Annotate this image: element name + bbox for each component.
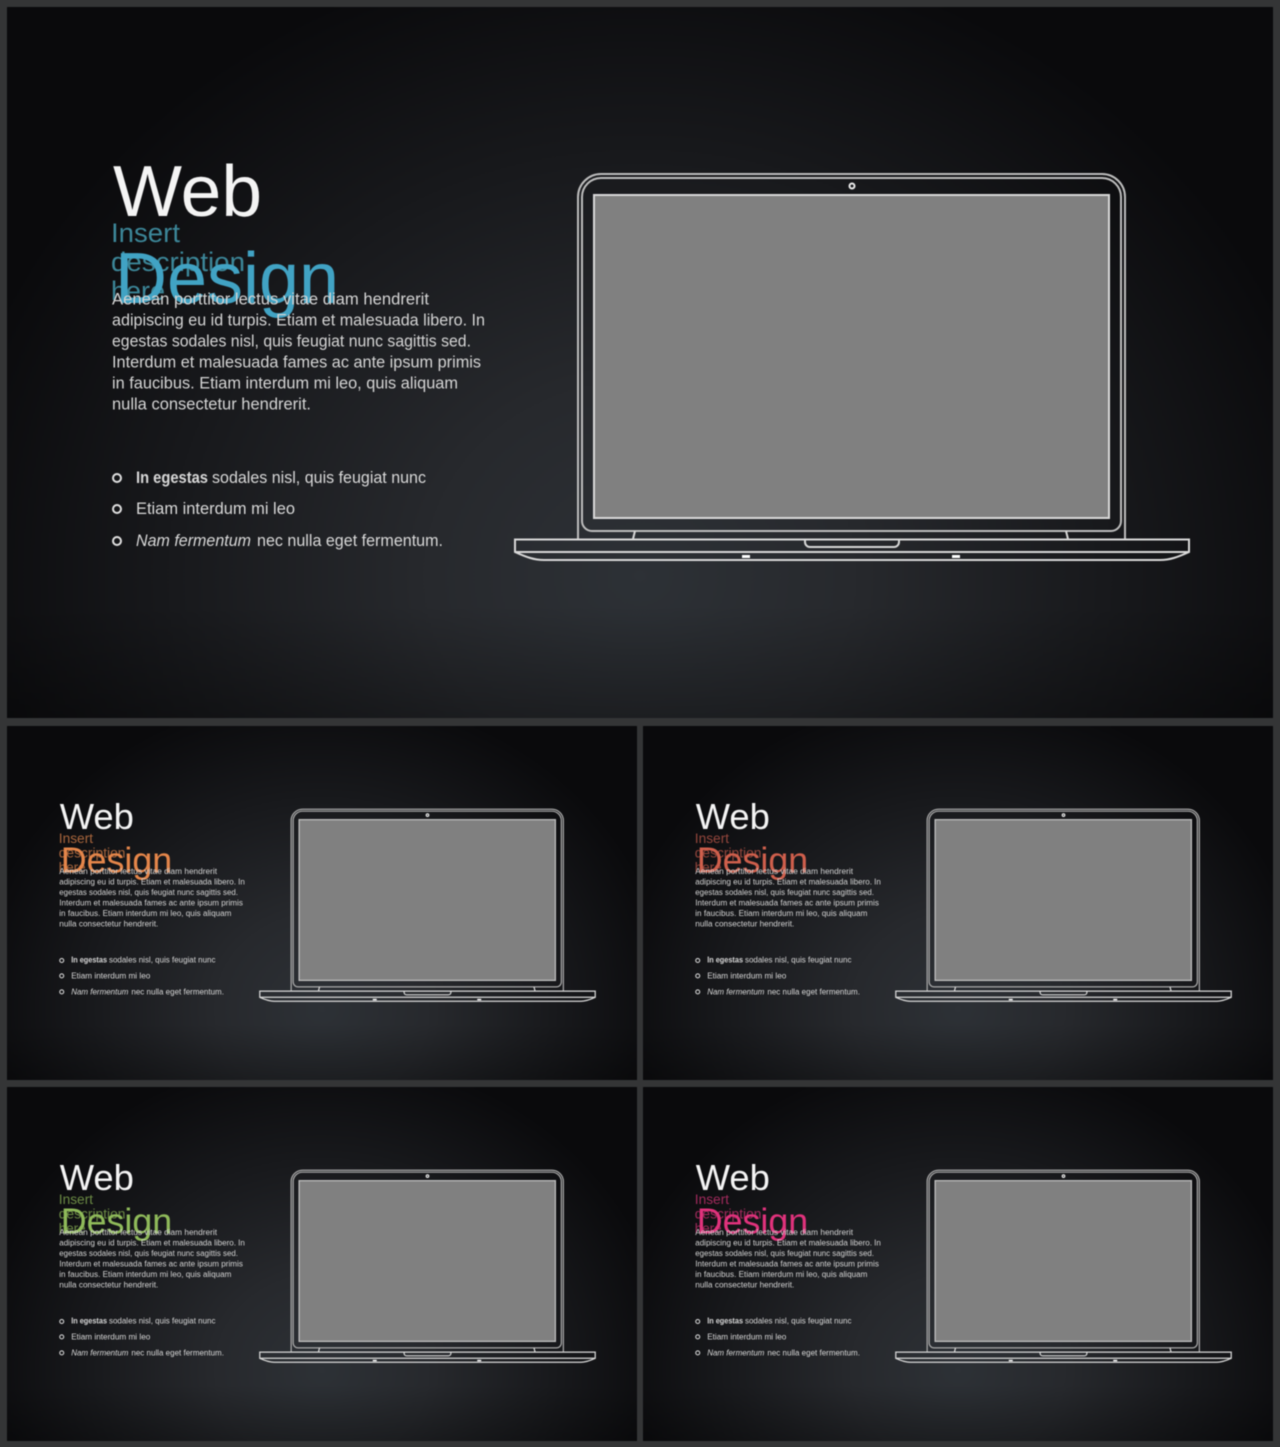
icon: laptop outline xyxy=(260,1170,595,1362)
bullet list: Etiam interdum mi leo xyxy=(707,1332,787,1341)
subtitle: Insert description here: Insert xyxy=(695,1192,729,1207)
bullet list xyxy=(113,469,443,550)
heading: Design: Design xyxy=(61,840,172,880)
bullet list: nec nulla eget fermentum. xyxy=(257,532,443,550)
subtitle: Insert description here: description xyxy=(59,1206,125,1221)
bullet list: nec nulla eget fermentum. xyxy=(767,987,860,996)
body paragraph xyxy=(695,867,881,928)
bullet list: In egestas xyxy=(71,1316,107,1325)
subtitle: Insert description here: Insert xyxy=(695,831,729,846)
bullet list: In egestas xyxy=(71,955,107,964)
bullet list: Nam fermentum xyxy=(136,532,251,550)
body paragraph: Interdum et malesuada fames ac ante ipsum primis xyxy=(112,354,481,372)
body paragraph: in faucibus. Etiam interdum mi leo, quis aliquam xyxy=(112,375,458,393)
body paragraph: Aenean porttitor lectus vitae diam hendrerit xyxy=(59,867,218,876)
bullet list: In egestas xyxy=(707,1316,743,1325)
subtitle: Insert description here xyxy=(695,831,761,875)
body paragraph: adipiscing eu id turpis. Etiam et malesuada libero. In xyxy=(695,878,881,887)
bullet list: Nam fermentum xyxy=(707,1348,765,1357)
subtitle: Insert description here: Insert xyxy=(59,1192,93,1207)
bullet list: Etiam interdum mi leo xyxy=(136,500,295,518)
panel: small slide, green xyxy=(7,1087,637,1441)
bullet list: sodales nisl, quis feugiat nunc xyxy=(109,955,216,964)
icon: laptop outline xyxy=(896,1170,1231,1362)
subtitle: Insert description here: description xyxy=(111,247,245,277)
icon: laptop outline xyxy=(515,174,1189,560)
body paragraph xyxy=(695,1228,881,1289)
bullet list: sodales nisl, quis feugiat nunc xyxy=(109,1316,216,1325)
panel: small slide, red xyxy=(643,726,1273,1080)
body paragraph: Interdum et malesuada fames ac ante ipsum primis xyxy=(59,1260,243,1269)
body paragraph: egestas sodales nisl, quis feugiat nunc sagittis sed. xyxy=(112,333,471,351)
subtitle: Insert description here xyxy=(695,1192,761,1236)
heading: Web: Web xyxy=(696,1158,770,1198)
heading: Web: Web xyxy=(60,1158,134,1198)
body paragraph: Interdum et malesuada fames ac ante ipsum primis xyxy=(695,1260,879,1269)
bullet list xyxy=(696,1316,860,1357)
subtitle: Insert description here: here xyxy=(695,1221,722,1236)
bullet list: In egestas xyxy=(136,469,208,487)
bullet list: sodales nisl, quis feugiat nunc xyxy=(745,1316,852,1325)
body paragraph: egestas sodales nisl, quis feugiat nunc sagittis sed. xyxy=(59,888,238,897)
bullet list: In egestas xyxy=(707,955,743,964)
body paragraph: adipiscing eu id turpis. Etiam et malesuada libero. In xyxy=(59,1239,245,1248)
heading: Web: Web xyxy=(60,797,134,837)
bullet list xyxy=(60,955,224,996)
bullet list xyxy=(60,1316,224,1357)
body paragraph xyxy=(112,291,485,414)
heading: Design: Design xyxy=(697,1201,808,1241)
subtitle: Insert description here: here xyxy=(111,276,165,306)
bullet list: nec nulla eget fermentum. xyxy=(131,987,224,996)
body paragraph: nulla consectetur hendrerit. xyxy=(59,1280,158,1289)
subtitle: Insert description here xyxy=(59,1192,125,1236)
body paragraph xyxy=(59,1228,245,1289)
bullet list: Etiam interdum mi leo xyxy=(707,971,787,980)
heading: Design: Design xyxy=(61,1201,172,1241)
icon: laptop outline xyxy=(896,809,1231,1001)
body paragraph: Interdum et malesuada fames ac ante ipsum primis xyxy=(59,899,243,908)
icon: laptop outline xyxy=(260,809,595,1001)
panel: main slide, blue xyxy=(7,7,1273,718)
body paragraph xyxy=(59,867,245,928)
bullet list: Etiam interdum mi leo xyxy=(71,1332,151,1341)
subtitle: Insert description here: Insert xyxy=(111,218,181,248)
bullet list: Etiam interdum mi leo xyxy=(71,971,151,980)
body paragraph: nulla consectetur hendrerit. xyxy=(59,919,158,928)
subtitle: Insert description here xyxy=(111,218,245,306)
body paragraph: egestas sodales nisl, quis feugiat nunc sagittis sed. xyxy=(695,1249,874,1258)
subtitle: Insert description here: here xyxy=(59,860,86,875)
heading: Design: Design xyxy=(115,239,339,319)
panel: small slide, pink xyxy=(643,1087,1273,1441)
bullet list: Nam fermentum xyxy=(71,987,129,996)
body paragraph: Aenean porttitor lectus vitae diam hendrerit xyxy=(695,867,854,876)
body paragraph: nulla consectetur hendrerit. xyxy=(695,1280,794,1289)
subtitle: Insert description here: Insert xyxy=(59,831,93,846)
body paragraph: Interdum et malesuada fames ac ante ipsum primis xyxy=(695,899,879,908)
body paragraph: adipiscing eu id turpis. Etiam et malesuada libero. In xyxy=(695,1239,881,1248)
bullet list: sodales nisl, quis feugiat nunc xyxy=(745,955,852,964)
subtitle: Insert description here xyxy=(59,831,125,875)
heading: Web: Web xyxy=(696,797,770,837)
body paragraph: Aenean porttitor lectus vitae diam hendrerit xyxy=(59,1228,218,1237)
body paragraph: nulla consectetur hendrerit. xyxy=(112,396,311,414)
body paragraph: Aenean porttitor lectus vitae diam hendrerit xyxy=(112,291,429,309)
body paragraph: in faucibus. Etiam interdum mi leo, quis aliquam xyxy=(59,1270,232,1279)
subtitle: Insert description here: here xyxy=(59,1221,86,1236)
body paragraph: in faucibus. Etiam interdum mi leo, quis aliquam xyxy=(59,909,232,918)
panel: small slide, orange xyxy=(7,726,637,1080)
body paragraph: in faucibus. Etiam interdum mi leo, quis aliquam xyxy=(695,909,868,918)
bullet list: sodales nisl, quis feugiat nunc xyxy=(212,469,426,487)
body paragraph: egestas sodales nisl, quis feugiat nunc sagittis sed. xyxy=(59,1249,238,1258)
body paragraph: nulla consectetur hendrerit. xyxy=(695,919,794,928)
subtitle: Insert description here: description xyxy=(59,845,125,860)
subtitle: Insert description here: description xyxy=(695,1206,761,1221)
heading: Web: Web xyxy=(113,152,262,232)
body paragraph: Aenean porttitor lectus vitae diam hendrerit xyxy=(695,1228,854,1237)
body paragraph: adipiscing eu id turpis. Etiam et malesuada libero. In xyxy=(59,878,245,887)
bullet list: Nam fermentum xyxy=(707,987,765,996)
bullet list: nec nulla eget fermentum. xyxy=(767,1348,860,1357)
body paragraph: in faucibus. Etiam interdum mi leo, quis aliquam xyxy=(695,1270,868,1279)
bullet list: Nam fermentum xyxy=(71,1348,129,1357)
bullet list: nec nulla eget fermentum. xyxy=(131,1348,224,1357)
heading: Design: Design xyxy=(697,840,808,880)
body paragraph: egestas sodales nisl, quis feugiat nunc sagittis sed. xyxy=(695,888,874,897)
subtitle: Insert description here: description xyxy=(695,845,761,860)
bullet list xyxy=(696,955,860,996)
subtitle: Insert description here: here xyxy=(695,860,722,875)
body paragraph: adipiscing eu id turpis. Etiam et malesuada libero. In xyxy=(112,312,485,330)
